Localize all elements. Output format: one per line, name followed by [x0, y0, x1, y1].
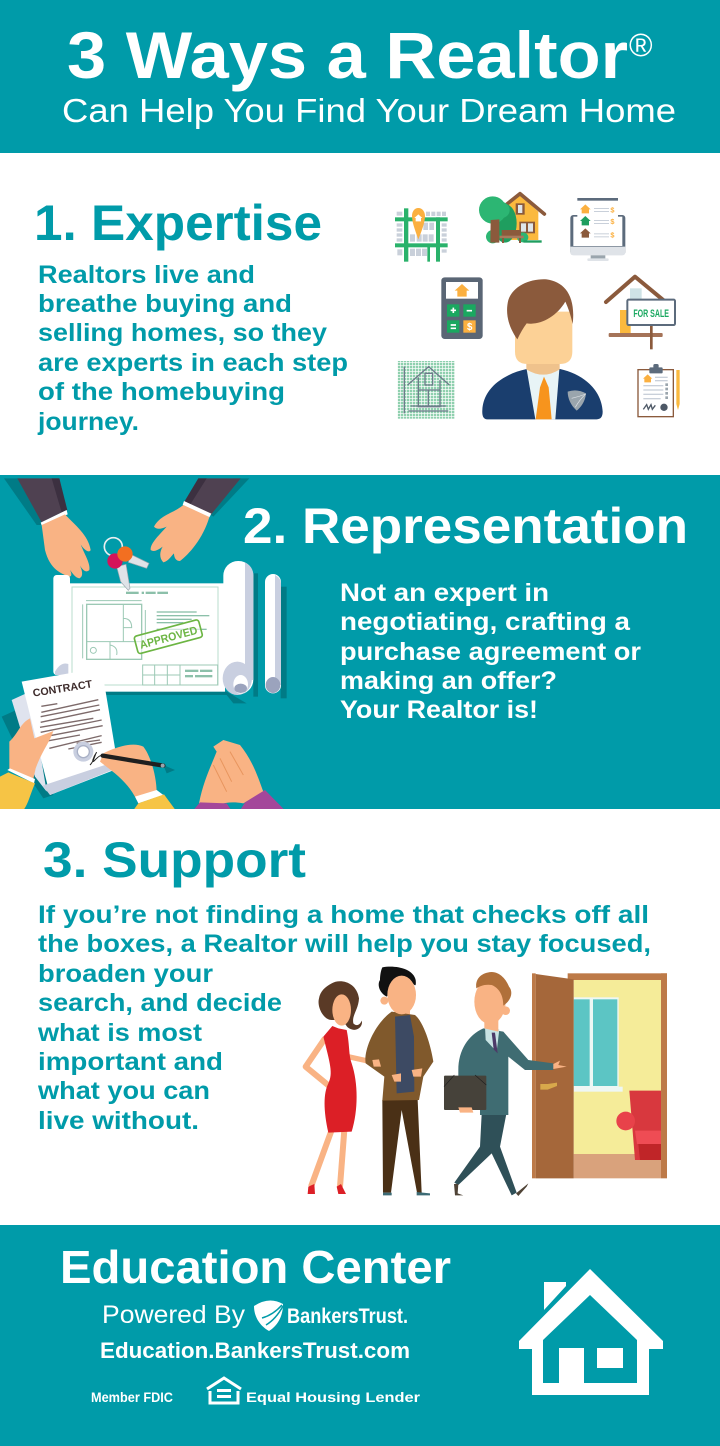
blueprint sheet — [53, 575, 225, 692]
logo wordmark: BankersTrust. — [287, 1305, 408, 1328]
agent with briefcase — [444, 972, 567, 1196]
contract document: CONTRACT — [32, 678, 94, 700]
shadows — [2, 478, 287, 798]
heading: Education Center: Education Center — [60, 1241, 451, 1293]
illustration: contract and blueprint table — [0, 478, 287, 809]
icon: house — [519, 1269, 663, 1395]
blueprint rolls — [223, 561, 281, 695]
heading: 1. Expertise: 1. Expertise — [34, 195, 322, 251]
website url: Education.BankersTrust.com — [100, 1338, 410, 1363]
panel: support — [0, 809, 720, 1225]
text block: support: important and — [38, 1048, 223, 1076]
text block: expertise: breathe buying and — [38, 290, 292, 318]
icon: realtor person — [482, 279, 603, 419]
woman in red dress — [306, 981, 378, 1194]
subtitle: Can Help You Find Your Dream Home — [62, 92, 676, 129]
member fdic: Member FDIC — [91, 1389, 173, 1405]
open doorway and room — [532, 973, 667, 1178]
text block: expertise: selling homes, so they — [38, 319, 327, 347]
registered mark: ® — [629, 27, 653, 63]
powered by: Powered By — [102, 1301, 246, 1329]
hands signing — [0, 718, 175, 809]
text block: support — [37, 901, 651, 1135]
man in brown jacket — [365, 967, 433, 1195]
icon: calculator: $ — [467, 322, 473, 333]
text block: representation: negotiating, crafting a — [340, 608, 631, 636]
icon: keys — [104, 538, 149, 590]
icon: calculator — [441, 277, 483, 339]
panel: header — [0, 0, 720, 153]
icon: equal housing — [207, 1378, 241, 1403]
text block: support: the boxes, a Realtor will help you stay focused, — [38, 930, 651, 958]
icon: monitor listing — [570, 198, 625, 261]
logo: Bankers Trust shield — [254, 1300, 283, 1331]
text block: representation — [340, 579, 641, 724]
text block: support: broaden your — [38, 960, 213, 988]
text block: support: live without. — [38, 1107, 199, 1135]
text block: expertise — [37, 261, 348, 436]
icon: for sale sign — [606, 277, 675, 349]
icon: house with tree — [479, 194, 544, 243]
heading: 3. Support: 3. Support — [43, 832, 306, 888]
text block: representation: Not an expert in — [340, 579, 549, 607]
icon: monitor listing: $ — [610, 230, 614, 239]
heading: 2. Representation: 2. Representation — [243, 498, 688, 554]
text block: representation: Your Realtor is! — [340, 696, 538, 724]
panel: expertise — [0, 153, 720, 475]
icon: blueprint grid — [397, 361, 455, 419]
text block: support: If you’re not finding a home that checks off all — [38, 901, 649, 929]
illustration: realtor and home icons — [395, 194, 680, 419]
text block: expertise: of the homebuying — [38, 378, 285, 406]
stamp: approved: APPROVED — [139, 625, 199, 652]
illustration: agent showing couple a home — [306, 967, 667, 1196]
text block: expertise: Realtors live and — [38, 261, 255, 289]
text block: support: what is most — [37, 1019, 203, 1047]
panel: footer — [0, 1225, 720, 1446]
text block: representation: making an offer? — [340, 667, 557, 695]
sleeves and top hands — [17, 478, 241, 578]
title: 3 Ways a Realtor — [67, 18, 628, 92]
icon: map with pin — [395, 208, 448, 262]
equal housing lender: Equal Housing Lender — [246, 1389, 421, 1405]
text block: representation: purchase agreement or — [340, 638, 641, 666]
text block: expertise: journey. — [37, 408, 139, 436]
text block: expertise: are experts in each step — [38, 349, 348, 377]
hands clasped — [194, 740, 284, 809]
contract document — [12, 668, 118, 795]
panel: representation — [0, 475, 720, 809]
icon: monitor listing: $ — [610, 217, 614, 226]
text block: support: search, and decide — [38, 989, 282, 1017]
icon: monitor listing: $ — [610, 205, 614, 214]
icon: clipboard — [638, 364, 680, 417]
icon: for sale sign: FOR SALE — [633, 308, 669, 320]
text block: support: what you can — [37, 1077, 210, 1105]
